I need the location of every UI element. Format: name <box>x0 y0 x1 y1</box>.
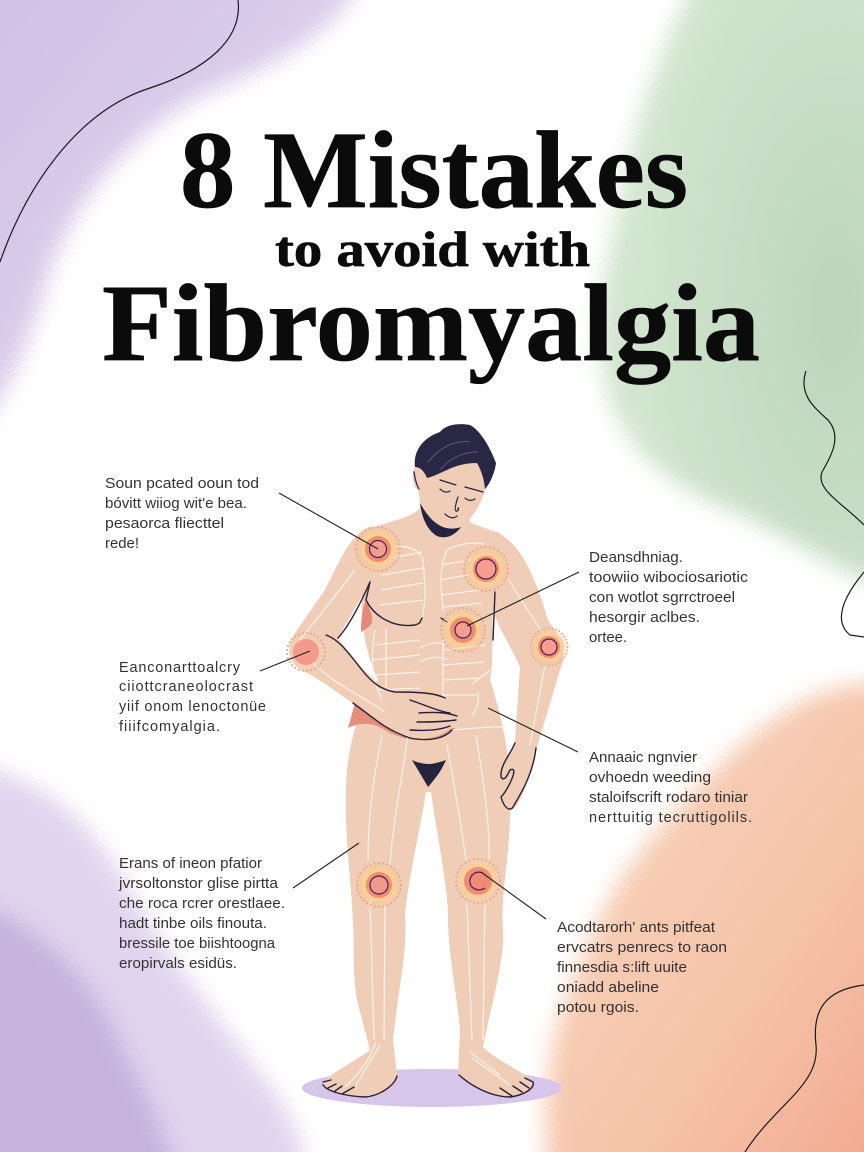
red patch: hip <box>348 703 456 740</box>
text block: bottom left <box>118 856 285 972</box>
pain point: right knee <box>456 859 500 903</box>
right arm <box>488 530 563 810</box>
background blob: lavender bottom left <box>0 765 310 1152</box>
body muscle lines <box>300 543 547 1087</box>
text block: upper right <box>589 550 748 646</box>
torso and legs <box>323 498 533 1097</box>
text block: bottom right: ervcatrs penrecs to raon <box>557 940 727 956</box>
background blob: peach bottom right <box>546 683 864 1152</box>
background blob: lavender top left <box>0 0 365 440</box>
text block: bottom right: finnesdia s:lift uuite <box>557 960 687 976</box>
text block: middle left <box>119 660 266 735</box>
callout line: hip <box>488 708 578 752</box>
text block: bottom left: hadt tinbe oils finouta. <box>119 916 267 932</box>
title line 1: 8 Mistakes <box>180 109 688 231</box>
text block: bottom left: che roca rcrer orestlaee. <box>119 896 285 912</box>
human figure <box>289 424 563 1097</box>
callout line: thigh <box>293 843 359 888</box>
text block: bottom right: Acodtarorh' ants pitfeat <box>557 920 715 936</box>
text block: bottom left: bressile toe biishtoogna <box>119 936 276 952</box>
decorative curve: right edge <box>841 572 864 637</box>
pain point: left elbow <box>287 633 325 671</box>
red patch: side chest <box>361 600 372 632</box>
text block: middle left: yiif onom lenoctonüe <box>119 699 266 715</box>
title <box>102 109 760 384</box>
text block: middle left: Eanconarttoalcry <box>119 660 241 676</box>
pain point: left shoulder <box>356 527 400 571</box>
pain point: right chest <box>464 547 508 591</box>
pelvis underwear <box>412 760 446 787</box>
hair <box>415 424 496 489</box>
text block: middle right: staloifscrift rodaro tiniar <box>589 790 748 806</box>
background blob: darker lavender bottom left <box>0 900 180 1152</box>
text block: upper right: Deansdhniag. <box>589 550 683 566</box>
callout line: knee <box>481 872 546 919</box>
text block: middle right: Annaaic ngnvier <box>589 750 697 766</box>
text block: top left: bóvitt wiiog wit'e bea. <box>105 496 247 512</box>
callout line: shoulder <box>279 493 378 549</box>
text block: bottom left: jvrsoltonstor glise pirtta <box>118 876 279 892</box>
neck and head <box>413 450 488 530</box>
face features <box>414 472 483 518</box>
text block: top left: pesaorca fliecttel <box>105 516 224 532</box>
left arm <box>289 526 458 739</box>
text block: upper right: hesorgir aclbes. <box>589 610 700 626</box>
text block: upper right: ortee. <box>589 630 627 646</box>
decorative curve: bottom right <box>745 985 864 1152</box>
pain point: left knee <box>357 863 401 907</box>
title line 2: to avoid with <box>275 221 590 277</box>
text block: upper right: con wotlot sgrrctroeel <box>589 590 735 606</box>
callout line: sternum <box>467 572 579 626</box>
text block: top left <box>105 476 259 552</box>
body outlines <box>323 582 536 1097</box>
background blob: green top right <box>600 0 864 590</box>
text block: top left: Soun pcated ooun tod <box>105 476 259 492</box>
text block: top left: rede! <box>105 536 139 552</box>
text block: bottom right <box>557 920 727 1016</box>
pain point: right elbow <box>530 628 568 666</box>
text block: bottom left: eropirvals esidüs. <box>119 956 237 972</box>
decorative curve: right <box>804 371 864 525</box>
beard shadow <box>420 503 461 537</box>
text block: bottom right: oniadd abeline <box>557 980 659 996</box>
pain point: sternum <box>441 608 485 652</box>
text block: upper right: toowiio wibociosariotic <box>589 570 748 586</box>
text block: middle right <box>589 750 752 826</box>
title line 3: Fibromyalgia <box>102 262 760 384</box>
text block: bottom right: potou rgois. <box>557 1000 639 1016</box>
hair highlights <box>428 442 478 470</box>
text block: middle right: ovhoedn weeding <box>589 770 711 786</box>
text block: middle left: fiiifcomyalgia. <box>119 719 220 735</box>
text block: middle left: ciiottcraneolocrast <box>119 679 253 695</box>
text block: middle right: nerttuitig tecruttigolils. <box>589 810 752 826</box>
decorative curve: top left <box>0 0 238 262</box>
text block: bottom left: Erans of ineon pfatior <box>119 856 262 872</box>
floor shadow ellipse <box>302 1069 562 1107</box>
callout line: elbow <box>260 651 310 671</box>
